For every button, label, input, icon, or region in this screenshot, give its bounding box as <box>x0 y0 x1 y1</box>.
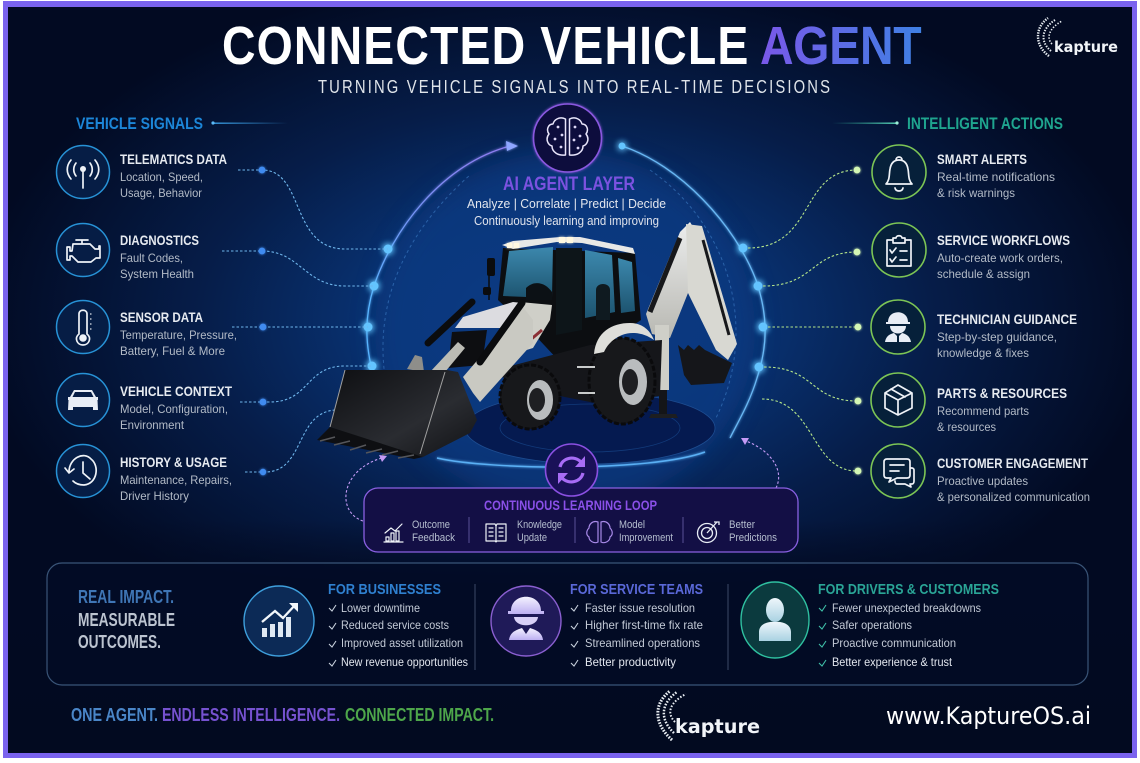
item: better predictions: Predictions <box>729 532 777 544</box>
column: for service teams: Streamlined operations <box>585 636 700 650</box>
item: parts and resources: Recommend parts <box>937 404 1029 418</box>
item: service workflows: SERVICE WORKFLOWS <box>937 232 1070 248</box>
heading: intelligent actions: INTELLIGENT ACTIONS <box>907 115 1063 133</box>
item: sensor data: Temperature, Pressure, <box>120 328 237 342</box>
column: for service teams: FOR SERVICE TEAMS <box>570 582 703 598</box>
item: diagnostics <box>56 224 199 281</box>
logo: kapture top: kapture <box>1054 38 1118 56</box>
item: service workflows: schedule & assign <box>937 267 1030 281</box>
logo: kapture top <box>1038 18 1118 56</box>
connectors: arc to right actions <box>748 167 861 474</box>
item: outcome feedback <box>384 519 455 544</box>
illustration: backhoe loader <box>317 222 737 459</box>
item: sensor data: SENSOR DATA <box>120 309 203 325</box>
item: model improvement: Improvement <box>619 532 673 544</box>
column: for businesses: Improved asset utilization <box>341 636 463 650</box>
column: for service teams <box>491 582 703 669</box>
item: vehicle context: Environment <box>120 418 185 432</box>
item: sensor data: Battery, Fuel & More <box>120 344 225 358</box>
item: telematics data: Location, Speed, <box>120 170 203 184</box>
item: parts and resources: PARTS & RESOURCES <box>937 385 1067 401</box>
column: for drivers and customers: Fewer unexpected breakdowns <box>832 601 981 615</box>
column: for businesses: FOR BUSINESSES <box>328 582 441 598</box>
front wheel <box>500 365 560 429</box>
loader arm <box>407 302 533 402</box>
title: CONNECTED VEHICLE <box>222 15 748 76</box>
item: outcome feedback: Outcome <box>412 519 450 531</box>
logo: kapture bottom: kapture <box>675 715 760 738</box>
column: for businesses <box>244 582 468 669</box>
intro text: OUTCOMES. <box>78 632 161 652</box>
panel: continuous learning loop <box>364 488 798 552</box>
item: parts and resources <box>871 373 1067 434</box>
heading: intelligent actions <box>832 115 1063 133</box>
cab <box>483 237 641 362</box>
rear backhoe arm <box>646 222 737 418</box>
subtitle: TURNING VEHICLE SIGNALS INTO REAL-TIME DECISIONS <box>318 76 830 97</box>
panel: vehicle signals list <box>56 146 237 503</box>
fender <box>594 323 654 354</box>
item: history and usage: HISTORY & USAGE <box>120 454 227 470</box>
website url: www.KaptureOS.ai <box>886 702 1091 730</box>
chassis <box>488 340 662 404</box>
item: history and usage: Driver History <box>120 489 189 503</box>
column: for drivers and customers: Proactive communication <box>832 636 956 650</box>
item: better predictions: Better <box>729 519 755 531</box>
intro text: REAL IMPACT. <box>78 587 174 607</box>
panel: real impact measurable outcomes <box>47 563 1088 685</box>
item: model improvement: Model <box>619 519 645 531</box>
column: for drivers and customers <box>741 582 999 669</box>
intro text <box>78 587 175 652</box>
tagline: ONE AGENT. <box>71 705 158 725</box>
item: smart alerts <box>872 145 1055 200</box>
item: telematics data: TELEMATICS DATA <box>120 151 227 167</box>
item: customer engagement: Proactive updates <box>937 474 1028 488</box>
arrow head into brain <box>506 141 518 151</box>
item: knowledge update: Update <box>517 532 547 544</box>
item: telematics data <box>56 146 227 200</box>
icon: AI brain badge <box>534 104 602 172</box>
item: diagnostics: DIAGNOSTICS <box>120 232 199 248</box>
item: diagnostics: Fault Codes, <box>120 251 183 265</box>
item: model improvement <box>587 519 673 544</box>
item: vehicle context: VEHICLE CONTEXT <box>120 383 232 399</box>
column: for drivers and customers: Better experience & trust <box>832 655 953 669</box>
item: diagnostics: System Health <box>120 267 194 281</box>
column: for drivers and customers: FOR DRIVERS & CUSTOMERS <box>818 582 999 598</box>
item: vehicle context <box>56 374 232 432</box>
tagline: ENDLESS INTELLIGENCE. <box>162 705 340 725</box>
item: vehicle context: Model, Configuration, <box>120 402 228 416</box>
item: technician guidance: TECHNICIAN GUIDANCE <box>937 311 1077 327</box>
central arc with signal nodes <box>364 141 768 438</box>
item: history and usage: Maintenance, Repairs, <box>120 473 232 487</box>
item: outcome feedback: Feedback <box>412 532 455 544</box>
item: sensor data <box>56 300 237 358</box>
column: for service teams: Higher first-time fix rate <box>585 618 703 632</box>
title: AGENT <box>760 15 922 76</box>
item: knowledge update <box>486 519 562 544</box>
AI agent layer text: AI AGENT LAYER <box>503 174 635 195</box>
item: better predictions <box>698 519 777 544</box>
tagline: CONNECTED IMPACT. <box>345 705 494 725</box>
heading: vehicle signals: VEHICLE SIGNALS <box>76 115 203 133</box>
item: knowledge update: Knowledge <box>517 519 562 531</box>
rear wheel <box>589 338 655 424</box>
column: for service teams: Faster issue resolution <box>585 601 695 615</box>
item: customer engagement: & personalized communication <box>937 490 1090 504</box>
tagline <box>71 705 494 725</box>
item: smart alerts: Real-time notifications <box>937 170 1055 184</box>
item: service workflows: Auto-create work orders, <box>937 251 1063 265</box>
dividers <box>469 517 683 543</box>
AI agent layer text: Continuously learning and improving <box>474 214 659 228</box>
loader bucket <box>317 370 477 459</box>
column: for businesses: New revenue opportunities <box>341 655 468 669</box>
column: for businesses: Lower downtime <box>341 601 420 615</box>
AI agent layer text: Analyze | Correlate | Predict | Decide <box>467 197 666 211</box>
item: service workflows <box>872 223 1070 281</box>
column: for service teams: Better productivity <box>585 655 676 669</box>
dividers <box>475 584 728 670</box>
item: smart alerts: SMART ALERTS <box>937 151 1027 167</box>
item: customer engagement: CUSTOMER ENGAGEMENT <box>937 455 1088 471</box>
hood and grille <box>448 302 552 368</box>
AI agent layer text <box>467 174 666 228</box>
item: parts and resources: & resources <box>937 420 996 434</box>
intro text: MEASURABLE <box>78 610 175 630</box>
column: for drivers and customers: Safer operations <box>832 618 912 632</box>
item: technician guidance <box>871 300 1077 360</box>
ground platform rings <box>437 392 715 467</box>
logo: kapture bottom <box>658 691 760 740</box>
icon: learning loop badge <box>546 444 598 496</box>
item: technician guidance: knowledge & fixes <box>937 346 1029 360</box>
column: for businesses: Reduced service costs <box>341 618 449 632</box>
panel: continuous learning loop: CONTINUOUS LEARNING LOOP <box>484 497 657 513</box>
connectors: left signals to arc <box>222 167 388 475</box>
item: history and usage <box>56 444 232 503</box>
item: customer engagement <box>871 444 1090 504</box>
item: technician guidance: Step-by-step guidance, <box>937 330 1057 344</box>
item: telematics data: Usage, Behavior <box>120 186 202 200</box>
dashed loop arrows <box>346 438 779 521</box>
panel: intelligent actions list <box>871 145 1090 504</box>
item: smart alerts: & risk warnings <box>937 186 1015 200</box>
